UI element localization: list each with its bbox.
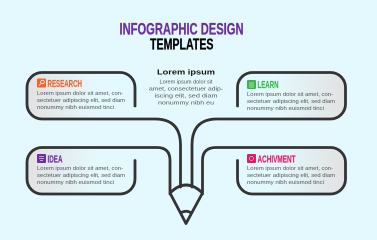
heading: learn: LEARN (258, 80, 278, 91)
center text block: Lorem ipsum dolor sit (160, 80, 213, 86)
text block: research: Lorem ipsum dolor sit amet, con- (37, 91, 123, 97)
heading: idea: IDEA (48, 154, 62, 165)
text block: achivment: sectetuer adipiscing elit, sed diam (247, 173, 336, 179)
center text block (149, 68, 223, 106)
text block: learn: sectetuer adipiscing elit, sed diam (247, 99, 336, 105)
center text block: amet, consectetuer adip- (149, 86, 223, 92)
text block: idea (37, 166, 126, 186)
icon: learn (247, 80, 256, 89)
panel: research (27, 72, 180, 187)
center text block: Lorem ipsum (157, 68, 215, 76)
title (120, 20, 244, 53)
text block: learn: nonummy nibh euismod tinci (247, 106, 324, 112)
icon: magnifier (37, 78, 46, 88)
text block: research (37, 91, 126, 111)
title: INFOGRAPHIC DESIGN (120, 20, 244, 38)
text block: achivment: Lorem ipsum dolor sit amet, con- (247, 166, 333, 172)
text block: learn (247, 92, 336, 112)
title: TEMPLATES (150, 36, 214, 53)
heading: research: RESEARCH (48, 79, 82, 90)
text block: idea: sectetuer adipiscing elit, sed diam (37, 173, 126, 179)
text block: research: nonummy nibh euismod tinci (37, 105, 114, 111)
text block: achivment (247, 166, 336, 186)
center text block: nonummy nibh eu (158, 100, 214, 106)
icon: pencil (170, 185, 202, 224)
panel: learn (192, 72, 346, 187)
heading: achivment: ACHIVMENT (258, 154, 296, 165)
panel: achivment (202, 148, 346, 194)
panel: idea (27, 148, 170, 194)
text block: research: sectetuer adipiscing elit, sed diam (37, 98, 126, 104)
text block: idea: nonummy nibh euismod tinci (37, 180, 114, 186)
icon: idea (37, 154, 46, 163)
text block: learn: Lorem ipsum dolor sit amet, con- (247, 92, 333, 98)
text block: achivment: nonummy nibh euismod tinci (247, 180, 324, 186)
text block: idea: Lorem ipsum dolor sit amet, con- (37, 166, 123, 172)
center text block: iscing elit, sed diam (154, 94, 218, 100)
icon: achivment (247, 154, 256, 163)
